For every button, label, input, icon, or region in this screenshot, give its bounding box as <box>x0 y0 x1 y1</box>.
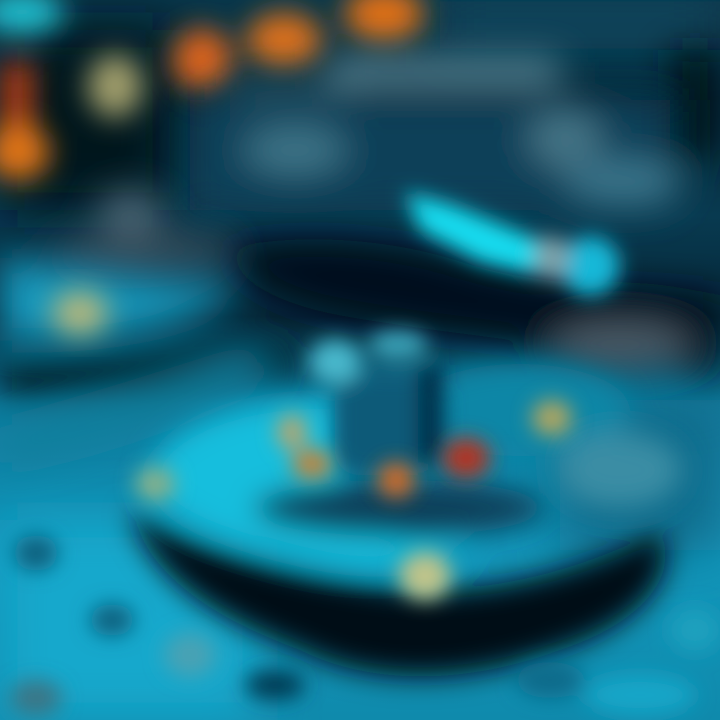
dark band right <box>220 239 720 375</box>
central platform <box>130 364 682 676</box>
glowing lights <box>135 400 572 600</box>
central tower <box>309 330 445 475</box>
lower dots <box>10 535 720 716</box>
yellow light left <box>52 291 108 335</box>
orange lights <box>172 0 424 92</box>
upper band and gray blobs <box>190 50 720 210</box>
cyan streak <box>405 192 620 296</box>
upper left lights <box>0 0 143 180</box>
left saucer <box>0 190 300 465</box>
